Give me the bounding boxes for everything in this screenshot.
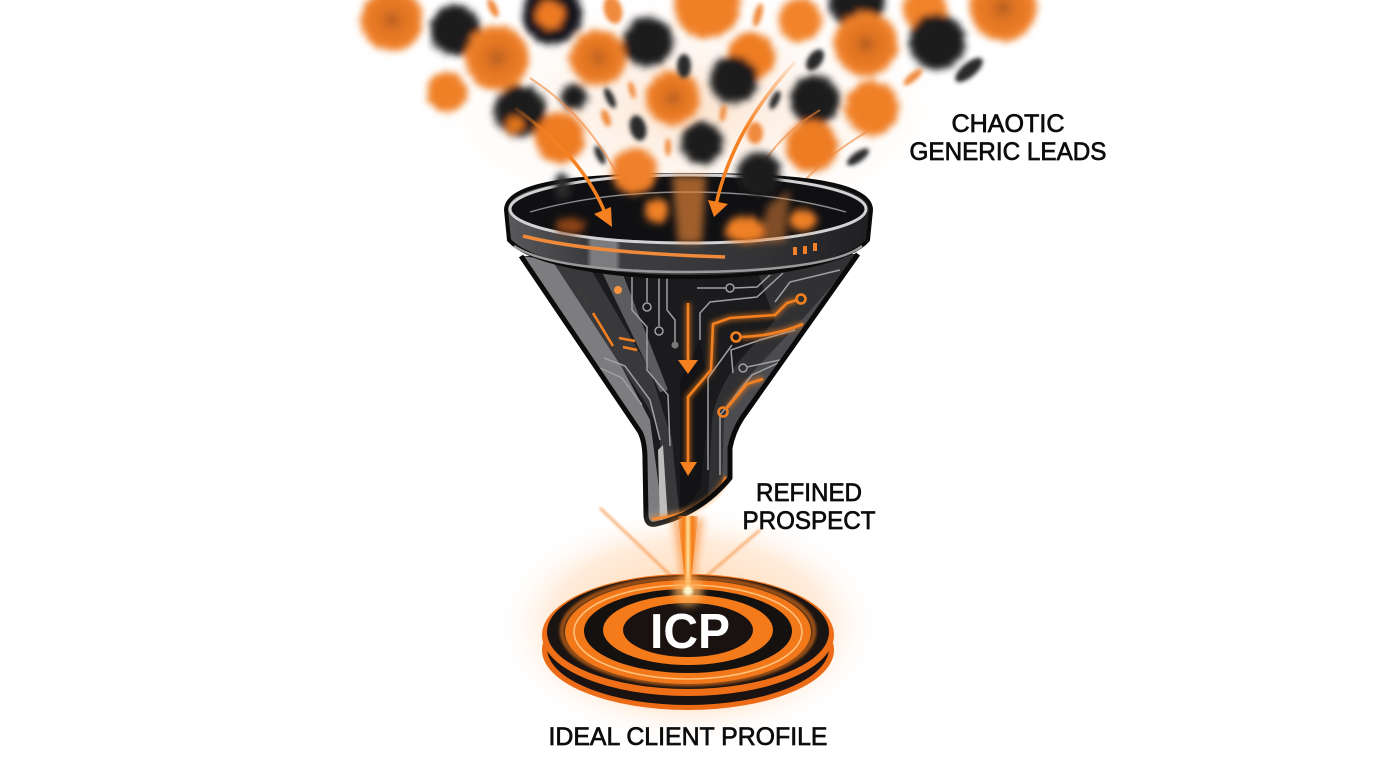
- center: [623, 603, 753, 657]
- funnel cone: [521, 254, 858, 524]
- band bottom silver edge: [514, 246, 862, 272]
- rim indicator lights: [793, 243, 817, 255]
- circuit traces: [600, 270, 840, 475]
- beam glow: [672, 518, 704, 592]
- rim orange line: [523, 236, 725, 257]
- label: ideal client profile: IDEAL CLIENT PROFILE: [548, 723, 828, 751]
- orange ring: [565, 580, 811, 684]
- label: chaotic generic leads: GENERIC LEADS: [910, 138, 1106, 166]
- center arrow heads: [678, 360, 698, 476]
- light rays: from funnel spout: [600, 508, 760, 592]
- outer black ring: [547, 575, 829, 689]
- label: refined prospect: PROSPECT: [742, 507, 876, 535]
- circuit dot: [672, 342, 678, 348]
- target base: [542, 590, 834, 710]
- glow: around target: [493, 505, 883, 745]
- label: refined prospect: REFINED: [756, 479, 862, 507]
- beam: from funnel to target: [678, 516, 698, 592]
- funnel cone outline: [521, 254, 858, 524]
- label: ICP: ICP: [650, 605, 730, 659]
- glow: behind the falling leads: [400, 0, 980, 240]
- glowing dot: [614, 286, 622, 294]
- funnel: [506, 62, 871, 526]
- arrow: right lead into funnel: [708, 62, 795, 217]
- cone glass panels: [521, 254, 858, 526]
- label: chaotic generic leads: CHAOTIC: [952, 110, 1064, 138]
- target: ICP disc: [542, 574, 834, 710]
- inner back arc: [530, 192, 846, 212]
- glowing orange circuit lines: [579, 292, 806, 519]
- falling leads at funnel mouth: [554, 148, 781, 199]
- funnel rim band: [506, 175, 871, 277]
- funnel opening: [510, 175, 866, 243]
- orange circuit glow: [652, 300, 803, 519]
- label: chaotic generic leads: [910, 110, 1106, 166]
- inner orange ring: [603, 595, 773, 665]
- arrows: thin flow trails into the funnel: [530, 78, 870, 232]
- outer orange glow: [562, 578, 814, 684]
- particles: chaotic generic leads: [361, 0, 1036, 172]
- arrow: left lead into funnel: [515, 108, 612, 227]
- infographic: lead funnel to ideal client profile: [354, 0, 1106, 746]
- label: refined prospect: [742, 479, 876, 535]
- spark: impact point: [673, 576, 703, 606]
- glowing items inside funnel: [555, 176, 817, 243]
- second black ring: [584, 589, 792, 673]
